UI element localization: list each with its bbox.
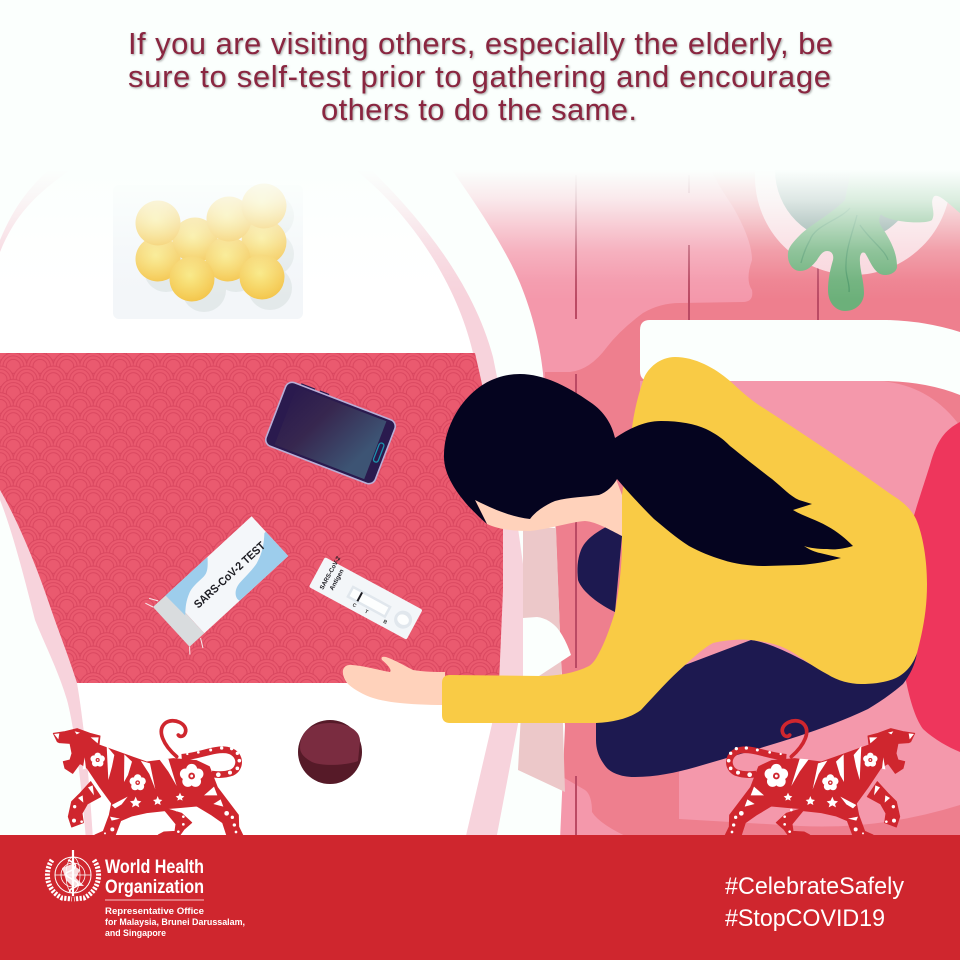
sofa backrest (640, 320, 960, 395)
title (128, 26, 833, 127)
phone (264, 379, 398, 486)
WHO wordmark: Organization (105, 877, 204, 898)
WHO wordmark (105, 857, 245, 938)
cassette label: Antigen (328, 568, 346, 592)
red cushion (906, 422, 960, 752)
panel: table top (0, 100, 571, 840)
hashtags: #StopCOVID19 (725, 905, 885, 932)
phone side buttons (301, 384, 329, 395)
pack body (168, 516, 288, 633)
marks C T B: B (382, 619, 388, 626)
marks C T B (351, 602, 388, 626)
far knee (577, 527, 622, 612)
table edge stripe (0, 150, 523, 840)
phone body (264, 380, 397, 486)
patterned table runner (0, 353, 510, 684)
wall seam lines (576, 175, 818, 836)
marks C T B: T (363, 609, 369, 616)
pack tear strings (143, 591, 207, 657)
title: others to do the same. (321, 92, 637, 127)
title: sure to self-test prior to gathering and encourage (128, 59, 831, 94)
hashtags (725, 873, 904, 932)
phone home button (373, 442, 385, 463)
WHO divider line (105, 900, 204, 901)
window dark circle (775, 98, 919, 242)
oranges (136, 184, 286, 302)
hashtags: #CelebrateSafely (725, 873, 904, 900)
test pack (143, 510, 295, 657)
marks C T B: C (351, 602, 357, 609)
continents (62, 864, 84, 886)
person (343, 357, 927, 777)
window circle (755, 79, 951, 275)
office name: Representative Office (105, 905, 204, 916)
title: If you are visiting others, especially the elderly, be (128, 26, 833, 61)
panel: room wall (440, 79, 960, 840)
yellow sweater (442, 357, 927, 723)
ball shadows (144, 194, 294, 312)
organization name: World Health (105, 857, 204, 878)
pack seal (153, 593, 204, 647)
tiger right (725, 721, 915, 835)
bowl inside (300, 723, 360, 765)
WHO wordmark: for Malaysia, Brunei Darussalam, (105, 916, 245, 927)
cassette label (319, 555, 350, 595)
trousers (596, 640, 917, 777)
staff (72, 850, 74, 896)
top fade overlay (0, 0, 960, 300)
bowl (298, 720, 362, 784)
shadow band under table edge (518, 528, 565, 792)
pack blue waves (166, 557, 226, 616)
table white surface (0, 158, 503, 840)
laurel left (47, 860, 72, 899)
WHO emblem (47, 850, 99, 899)
face and neck (475, 479, 622, 536)
control line (356, 592, 363, 602)
wall dark area (545, 150, 960, 840)
wall light area (440, 150, 960, 840)
hair (444, 374, 853, 566)
hand (343, 657, 445, 705)
white blob (523, 617, 571, 676)
footer band (0, 835, 960, 960)
sample well (391, 607, 415, 632)
lower wall blob (558, 776, 634, 840)
test cassette (309, 551, 426, 640)
phone screen (275, 387, 386, 479)
table outer band (0, 100, 565, 840)
serpent (66, 860, 78, 892)
cassette label: SARS-CoV-2 (319, 555, 343, 591)
tray (113, 185, 303, 319)
cassette body (309, 557, 423, 640)
tray of mandarin oranges (113, 184, 303, 319)
plant leaf (788, 150, 960, 311)
sofa seat area (640, 381, 960, 827)
globe (55, 857, 91, 893)
tiger left (53, 721, 243, 835)
pack label: SARS-CoV-2 TEST (192, 540, 268, 611)
result window (348, 587, 390, 617)
WHO wordmark: and Singapore (105, 927, 166, 938)
bowl rim (298, 720, 362, 784)
sofa (640, 320, 960, 827)
laurel right (74, 860, 99, 899)
